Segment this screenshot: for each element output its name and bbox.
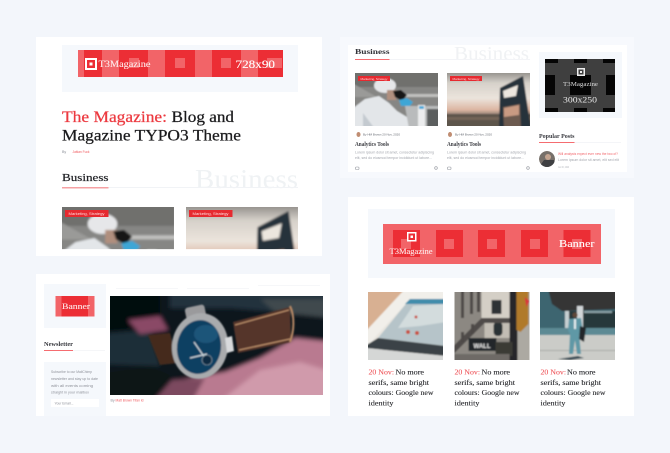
news item 1: colours: Google new [368, 389, 435, 397]
post title, right: Analytics Tools [447, 142, 482, 148]
newsletter box: newsletter and stay up to date [51, 377, 98, 381]
photo: Wall St sign [454, 292, 530, 360]
banner logo text: T3Magazine [98, 59, 150, 69]
sidebar heading: Popular Posts [539, 134, 621, 143]
panel: banner and news grid [348, 197, 634, 416]
banner size text: 728x90 [236, 59, 275, 71]
news item 3: identity [540, 400, 566, 408]
photo: tower at sunset [186, 207, 298, 250]
tag: Marketing, Strategy [68, 212, 105, 216]
post meta, left: By HM Brown 20 Nov, 2020 [363, 132, 400, 136]
panel: article page [36, 37, 322, 256]
banner logo text: T3Magazine [390, 246, 433, 256]
tag: Marketing, Strategy [192, 212, 229, 216]
newsletter heading: Newsletter [44, 342, 73, 348]
popular post text: Will analysts expect ever new the two of? [558, 152, 618, 156]
panel: business listing with sidebar [348, 45, 627, 172]
tag: Marketing, Strategy [452, 77, 480, 81]
post meta, right [448, 132, 492, 137]
post excerpt, left: Lorem ipsum dolor sit amet, consectetur adipiscing [355, 150, 434, 154]
post title, left: Analytics Tools [355, 142, 390, 148]
section heading: Business: Business [355, 47, 390, 56]
news item 1: 20 Nov: [368, 368, 394, 376]
photo caption: By [110, 398, 115, 402]
news item 1: serifs, same bright [368, 379, 429, 387]
section heading: Business [355, 43, 530, 65]
photo: tower at sunset [447, 73, 530, 126]
news item 3: serifs, same bright [540, 379, 601, 387]
section heading: Business: Business [195, 164, 298, 194]
photo caption: Matt Brown Tifan Id [116, 398, 144, 402]
banner slot [44, 284, 106, 328]
section heading: Business: Business [454, 43, 529, 65]
newsletter box [44, 362, 106, 416]
tag [65, 210, 108, 217]
email input: Your Email... [54, 402, 74, 406]
newsletter heading [44, 342, 105, 351]
photo: tablet [368, 292, 443, 360]
tag [189, 210, 232, 217]
ad slot 300x250 [539, 52, 622, 118]
panel: sidebar newsletter and feature photo [36, 274, 333, 416]
banner logo icon [407, 232, 416, 242]
sidebar heading: Popular Posts: Popular Posts [539, 134, 575, 140]
ad size text: 300x250 [563, 94, 597, 104]
byline: Jaštan Fuck [72, 150, 90, 154]
newsletter box: straight in your mailbox [51, 390, 89, 394]
news item 2: serifs, same bright [454, 379, 515, 387]
post excerpt, right: Lorem ipsum dolor sit amet, consectetur adipiscing [447, 150, 526, 154]
post excerpt, left: elit, sed do eiusmod tempor incididunt ut labore... [355, 156, 432, 160]
banner text: Banner [62, 301, 90, 311]
banner text: Banner [559, 238, 595, 250]
post meta, right: By HM Brown 20 Nov, 2020 [455, 132, 492, 136]
ad logo text: T3Magazine [563, 81, 598, 88]
photo: scientist at microscope [355, 73, 438, 126]
tag: Marketing, Strategy [360, 77, 388, 81]
section heading: Business [62, 164, 298, 194]
icons, left [356, 167, 437, 170]
news item 3: colours: Google new [540, 389, 607, 397]
banner slot [368, 209, 615, 278]
ad logo icon [577, 68, 585, 76]
icons, right [448, 167, 529, 170]
photo: scientist at microscope [62, 207, 174, 250]
tag [450, 76, 482, 81]
section heading: Business: Business [62, 173, 108, 184]
popular post text [558, 152, 619, 169]
news item 1: identity [368, 400, 394, 408]
news item 2: No more [482, 368, 510, 376]
faint nav lines [116, 285, 320, 289]
photo: wristwatch [110, 296, 323, 395]
newsletter box: Subscribe to our MailChimp [51, 370, 92, 374]
newsletter box: with all events coming [51, 384, 93, 388]
post meta, left [356, 132, 400, 137]
news item 3: 20 Nov: [540, 368, 566, 376]
news item 2: identity [454, 400, 480, 408]
photo: Wall St sign: WALL [474, 344, 491, 350]
post excerpt, right: elit, sed do eiusmod tempor incididunt ut labore... [447, 156, 524, 160]
tag [358, 76, 390, 81]
banner slot 728x90 [62, 45, 298, 92]
news item 1: No more [396, 368, 424, 376]
article title: The Magazine: [62, 109, 167, 126]
popular post avatar [539, 151, 556, 167]
popular post text: Lorem ipsum dolor sit amet, elit sed elit [558, 158, 619, 162]
banner logo icon [85, 58, 97, 70]
article title: Blog and [172, 109, 234, 126]
popular post text: Jun 06, 2020 [558, 165, 569, 169]
photo: man in suit [540, 292, 615, 360]
news item 2: 20 Nov: [454, 368, 480, 376]
news item 2: colours: Google new [454, 389, 521, 397]
article title: Magazine TYPO3 Theme [62, 128, 241, 144]
news item 3: No more [567, 368, 596, 376]
byline: By [62, 150, 66, 154]
